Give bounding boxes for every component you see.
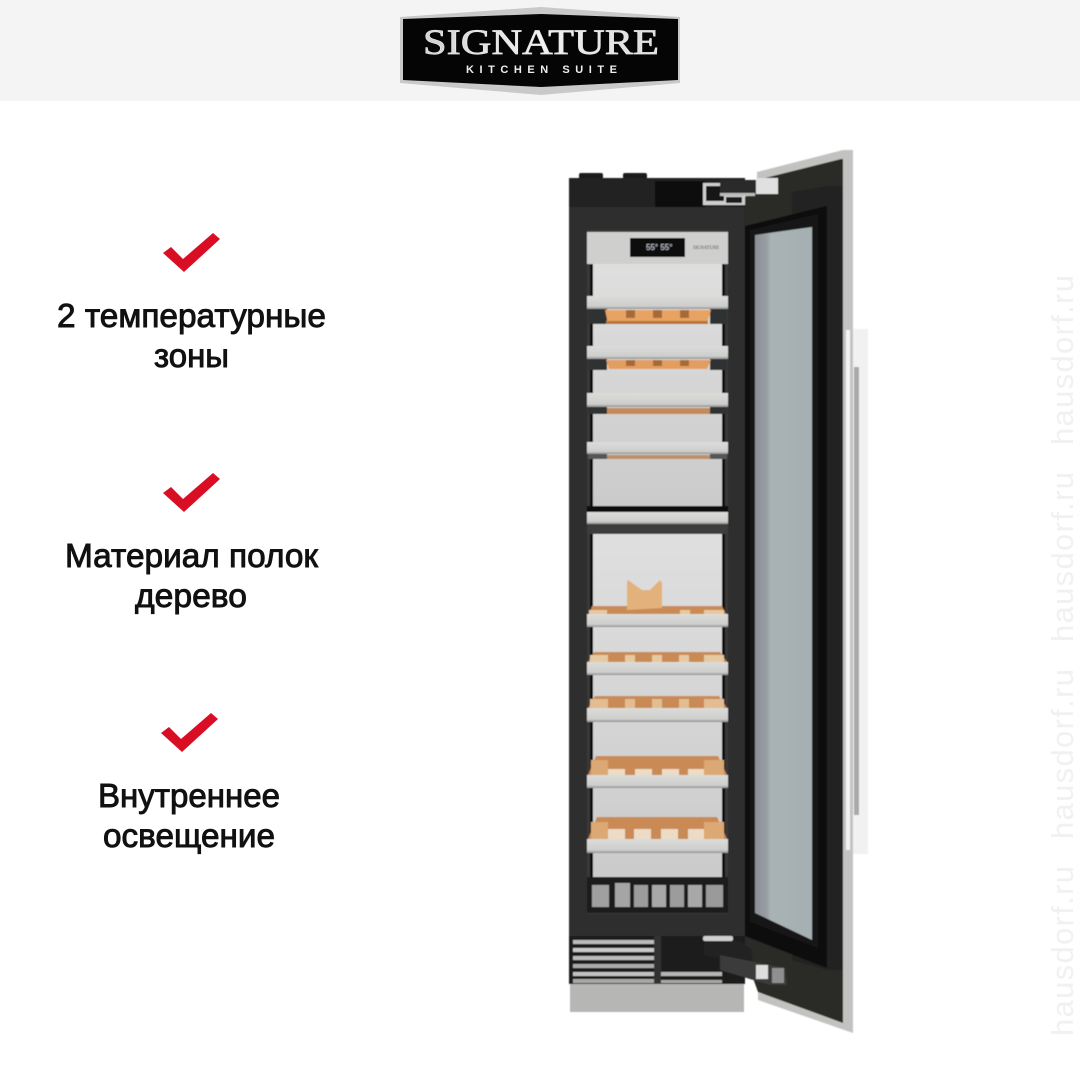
upper shelf 3 — [587, 393, 728, 414]
ventilation grille — [569, 936, 745, 984]
feature text — [98, 777, 280, 854]
icon: red check mark — [163, 233, 220, 272]
zone divider — [587, 506, 728, 534]
upper shelf 2 — [587, 346, 728, 370]
toe kick — [570, 984, 744, 1012]
wine cooler product image — [569, 150, 868, 1033]
control panel — [587, 232, 728, 264]
lower shelf 6 — [587, 652, 728, 675]
upper shelf 4 — [587, 442, 728, 459]
bottom bottle rack — [587, 877, 728, 913]
icon: red check mark — [161, 713, 218, 752]
interior cavity — [587, 230, 728, 914]
lower shelf 5 — [587, 606, 728, 627]
watermark: hausdorf.ru repeated: hausdorf.ru — [1045, 472, 1080, 642]
feature text: Внутреннее — [98, 777, 280, 814]
feature text — [65, 537, 319, 614]
top hinge — [703, 178, 778, 205]
logo: Signature Kitchen Suite: SIGNATURE — [423, 22, 659, 62]
wooden bottle holder — [627, 580, 662, 610]
control panel: SIGNATURE — [693, 246, 719, 251]
feature: wooden shelves — [65, 473, 319, 614]
lower shelf 9 — [587, 817, 728, 853]
cabinet body — [569, 207, 744, 936]
control panel: 55° 55° — [646, 243, 672, 252]
door glass — [755, 227, 812, 940]
upper shelf 1 — [587, 296, 728, 324]
open door — [743, 150, 853, 1033]
watermark: hausdorf.ru repeated: hausdorf.ru — [1045, 275, 1080, 445]
logo: Signature Kitchen Suite: KITCHEN SUITE — [466, 64, 617, 76]
cabinet top — [569, 173, 745, 208]
watermark: hausdorf.ru repeated — [1045, 275, 1080, 1036]
bottom hinge — [703, 936, 787, 985]
lower shelf 7 — [587, 696, 728, 722]
logo: Signature Kitchen Suite — [400, 7, 680, 95]
feature text: дерево — [135, 577, 247, 614]
icon: red check mark — [163, 473, 220, 512]
lower shelf 8 — [587, 756, 728, 788]
watermark: hausdorf.ru repeated: hausdorf.ru — [1045, 669, 1080, 839]
feature text: Материал полок — [65, 537, 319, 574]
feature text: 2 температурные — [57, 297, 326, 334]
feature: interior lighting — [98, 713, 280, 854]
feature text: зоны — [154, 337, 229, 374]
feature: 2 temperature zones — [57, 233, 326, 374]
feature text — [57, 297, 326, 374]
header band — [0, 0, 1080, 101]
handle panel — [853, 329, 868, 854]
watermark: hausdorf.ru repeated: hausdorf.ru — [1045, 866, 1080, 1036]
feature text: освещение — [103, 817, 275, 854]
